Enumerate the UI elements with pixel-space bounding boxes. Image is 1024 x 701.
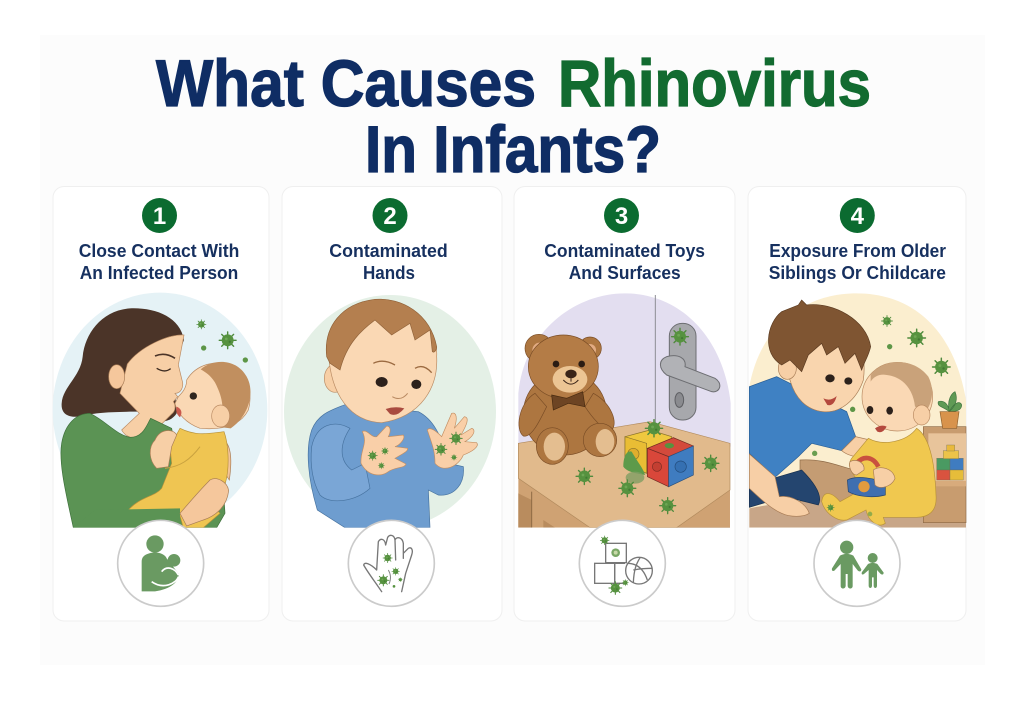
heading 3: And Surfaces bbox=[569, 263, 681, 283]
panel: close contact bbox=[53, 186, 269, 621]
icon: contaminated hand bbox=[348, 520, 434, 606]
door handle bbox=[669, 323, 696, 420]
heading 3: Contaminated Toys bbox=[544, 241, 705, 261]
icon: parent holding baby bbox=[118, 520, 204, 606]
number badge 4 bbox=[840, 198, 875, 233]
heading 4 bbox=[769, 241, 946, 283]
plant bbox=[938, 392, 962, 412]
heading 2: Contaminated bbox=[329, 241, 448, 261]
table top bbox=[518, 422, 730, 528]
number badge 2 bbox=[372, 198, 408, 233]
number badge 3 bbox=[604, 198, 639, 233]
icon: toy blocks and ball bbox=[579, 520, 665, 606]
number badge 3: 3 bbox=[615, 203, 628, 230]
panel: contaminated toys bbox=[514, 186, 735, 621]
heading 2: Hands bbox=[363, 263, 415, 283]
infographic bbox=[52, 57, 966, 622]
heading 4: Siblings Or Childcare bbox=[769, 263, 946, 283]
number badge 1: 1 bbox=[153, 203, 166, 230]
heading 2 bbox=[329, 241, 448, 283]
toy blocks bbox=[625, 430, 672, 473]
baby body bbox=[822, 428, 936, 525]
low wall and floor bbox=[800, 460, 855, 502]
table sides bbox=[518, 477, 730, 528]
heading 3 bbox=[544, 241, 705, 283]
title: What Causes bbox=[156, 46, 536, 120]
heading 1: An Infected Person bbox=[80, 263, 238, 283]
heading 1: Close Contact With bbox=[79, 241, 239, 261]
illustration: baby showing hands bbox=[284, 295, 496, 528]
illustration: toys and surfaces bbox=[518, 293, 731, 528]
toy blocks on shelf bbox=[937, 445, 963, 480]
number badge 2: 2 bbox=[383, 203, 397, 230]
boy bbox=[749, 470, 820, 507]
panel: older siblings bbox=[748, 186, 966, 621]
number badge 1 bbox=[142, 198, 177, 233]
icon: older child and baby bbox=[814, 520, 900, 606]
title: In Infants? bbox=[365, 112, 661, 186]
teddy bear bbox=[524, 382, 606, 456]
baby head bbox=[862, 362, 933, 431]
illustration: sibling and baby bbox=[749, 293, 966, 528]
stacking toy bbox=[847, 478, 885, 497]
title bbox=[156, 46, 871, 186]
title: Rhinovirus bbox=[558, 46, 871, 120]
illustration: mother kissing baby bbox=[53, 293, 267, 528]
panel: contaminated hands bbox=[282, 186, 502, 621]
shelf bbox=[923, 427, 966, 523]
number badge 4: 4 bbox=[851, 203, 865, 230]
heading 4: Exposure From Older bbox=[769, 241, 946, 261]
heading 1 bbox=[79, 241, 239, 283]
